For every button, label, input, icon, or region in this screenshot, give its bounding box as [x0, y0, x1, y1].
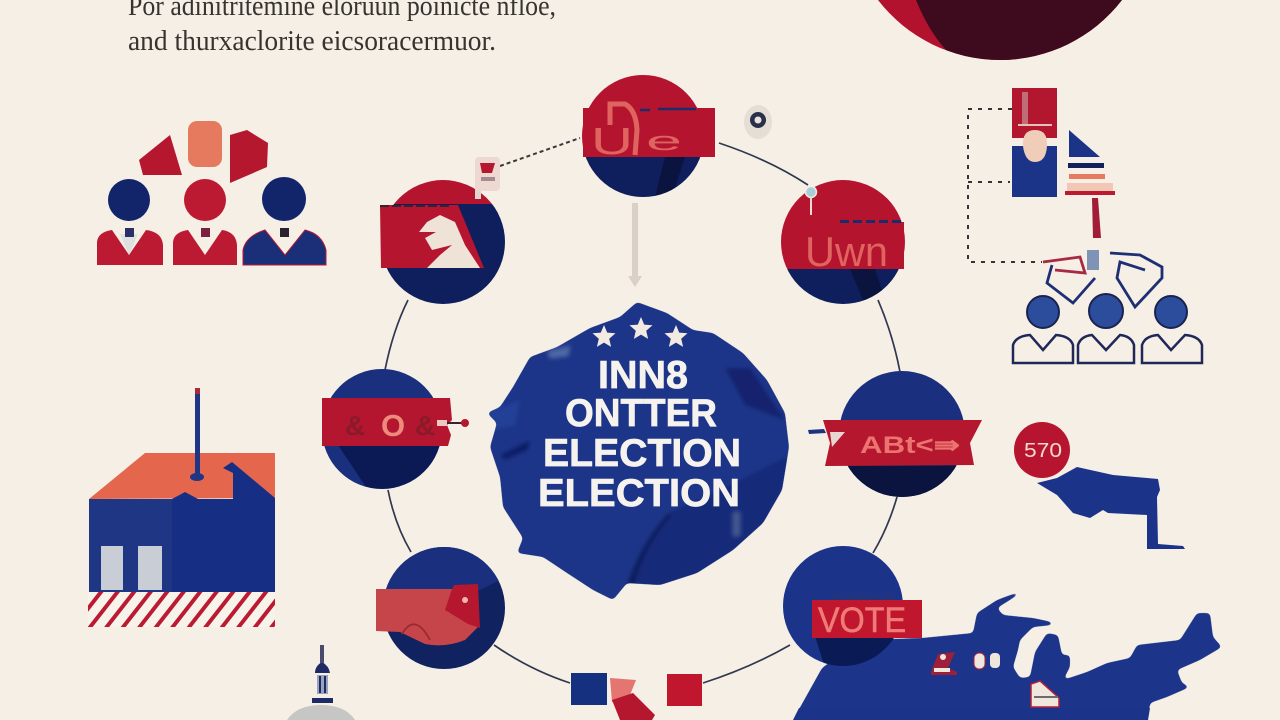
- circle: top: e: [646, 126, 682, 156]
- roof: [89, 453, 275, 499]
- circle: bottom right vote: [780, 540, 922, 670]
- bottom squares: [571, 673, 702, 720]
- portrait card: [1012, 88, 1057, 197]
- centre title: ELECTION: [538, 472, 740, 515]
- dashed bracket: [968, 109, 1042, 262]
- circle: upper left: [380, 180, 505, 304]
- map silhouette: [793, 592, 1222, 720]
- top-right partial circle: [878, 0, 1122, 60]
- centre globe badge: [489, 302, 789, 599]
- centre title: ONTTER: [565, 392, 717, 435]
- tag icon: [475, 157, 500, 191]
- windows: [101, 546, 123, 590]
- centre title: INN8: [598, 354, 688, 397]
- outline shapes: [1043, 253, 1162, 307]
- circle: bottom left handshake: [376, 540, 510, 669]
- striped podium: [1065, 130, 1115, 195]
- striped base: [88, 592, 275, 627]
- vote text: VOTE: [818, 601, 906, 640]
- pole: [195, 388, 200, 477]
- shapes above heads: [139, 135, 182, 175]
- hand icon: [1037, 467, 1185, 549]
- person 1: [97, 179, 163, 265]
- banner glyphs: U: [591, 121, 633, 163]
- circle: top: [582, 75, 715, 197]
- circle: right: [808, 365, 982, 500]
- silhouette: [419, 215, 480, 268]
- pin: [806, 186, 816, 198]
- right wall: [172, 462, 275, 592]
- banner glyphs: &: [345, 410, 365, 441]
- blue map: [793, 592, 1222, 720]
- person 3: [243, 177, 326, 265]
- outlined people: [1027, 294, 1187, 328]
- stars: [592, 317, 688, 347]
- centre title: [538, 354, 741, 515]
- globe shape: [489, 302, 789, 599]
- seal icon: [744, 105, 772, 139]
- left wall: [89, 499, 172, 592]
- circle: left: [320, 365, 469, 490]
- red stem: [1092, 198, 1101, 238]
- 570 badge: 570: [1024, 440, 1062, 462]
- dashed connector top: [500, 138, 580, 166]
- capitol dome: [287, 645, 355, 720]
- small document: [1087, 250, 1099, 270]
- circle: left: O: [381, 408, 405, 443]
- intro text: and thurxaclorite eicsoracermuor.: [128, 26, 496, 57]
- org chart icon right: [968, 88, 1202, 363]
- circle: upper right: [781, 180, 905, 304]
- people group left: [97, 121, 326, 265]
- pin marker: [437, 420, 447, 426]
- banner glyphs: Uwn: [805, 228, 888, 275]
- factory building: [88, 388, 275, 627]
- centre title: ELECTION: [543, 432, 741, 475]
- person 2: [173, 179, 237, 265]
- intro text: [128, 0, 556, 57]
- map markers: [931, 652, 957, 675]
- arrow down to centre: [628, 203, 642, 287]
- ring connector lines: [385, 143, 900, 683]
- circle: left: &: [415, 410, 435, 441]
- banner glyphs: ABt<⇛: [860, 432, 960, 459]
- 570 badge: [1014, 422, 1070, 478]
